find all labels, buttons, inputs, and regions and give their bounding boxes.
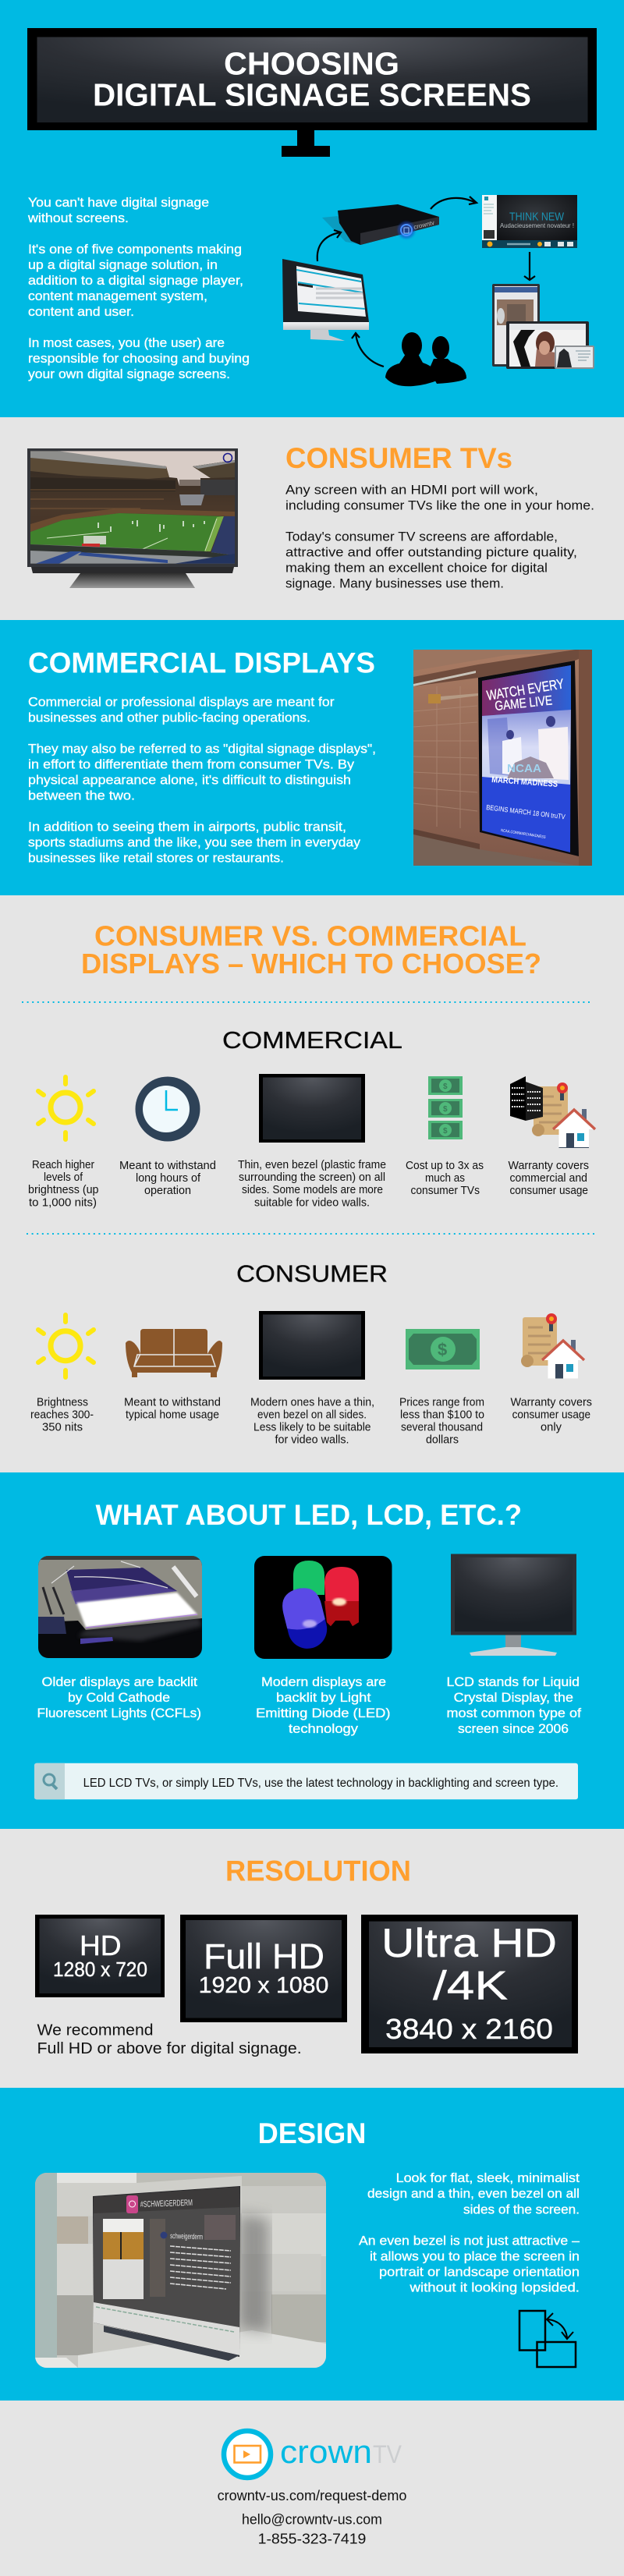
captions: commercial: to 1,000 nits) xyxy=(29,1196,97,1209)
image: subway digital poster: NCAA.COM/MARCHMADNESS xyxy=(501,828,546,840)
icon: desktop computer xyxy=(282,259,369,341)
captions: LED and LCD: technology xyxy=(289,1721,359,1736)
captions: commercial: operation xyxy=(144,1185,191,1197)
icon: clock xyxy=(136,1076,200,1142)
text: recommendation: Full HD or above for digital signage. xyxy=(37,2040,302,2057)
screen: Ultra HD 4K: /4K xyxy=(433,1964,508,2009)
logo: crownTV: crown xyxy=(280,2433,372,2470)
screen: Full HD: 1920 x 1080 xyxy=(199,1973,328,1998)
captions: consumer: typical home usage xyxy=(126,1409,219,1422)
captions: LED and LCD: by Cold Cathode xyxy=(68,1690,170,1705)
text: consumer TVs: attractive and offer outstanding picture quality, xyxy=(285,544,577,560)
captions: consumer xyxy=(30,1396,592,1447)
screen: Ultra HD 4K xyxy=(361,1915,578,2053)
captions: consumer: reaches 300- xyxy=(30,1409,94,1422)
captions: LED and LCD: Older displays are backlit xyxy=(42,1674,197,1689)
captions: consumer: only xyxy=(541,1422,562,1434)
intro text: You can't have digital signage xyxy=(28,195,209,210)
heading: design: DESIGN xyxy=(258,2117,366,2149)
title xyxy=(93,46,531,113)
intro text: In most cases, you (the user) are xyxy=(28,335,225,350)
captions: consumer: several thousand xyxy=(401,1422,483,1434)
icon: dollar bill xyxy=(406,1329,480,1369)
text: recommendation: We recommend xyxy=(37,2022,153,2039)
captions: commercial: Warranty covers xyxy=(509,1160,589,1172)
text: design: it allows you to place the screen in xyxy=(370,2249,580,2263)
text: design: portrait or landscape orientation xyxy=(379,2265,580,2279)
title: DIGITAL SIGNAGE SCREENS xyxy=(93,77,531,113)
text: consumer TVs: signage. Many businesses use them. xyxy=(285,576,504,590)
image: subway digital poster: NCAA xyxy=(507,762,541,775)
image: CCFL backlight xyxy=(38,1556,202,1658)
text: commercial displays: physical appearance alone, it's difficult to distinguish xyxy=(28,772,351,788)
heading: consumer vs commercial: CONSUMER VS. COMMERCIAL xyxy=(94,920,526,951)
intro text: content management system, xyxy=(28,289,207,303)
panel: intro xyxy=(0,0,624,417)
icon: sofa xyxy=(126,1329,222,1377)
image: wall-mounted screen xyxy=(35,2173,326,2368)
text: consumer TVs: Today's consumer TV screens are affordable, xyxy=(285,530,558,544)
title: CHOOSING xyxy=(224,46,399,82)
captions: LED and LCD: backlit by Light xyxy=(276,1690,371,1705)
captions: commercial: much as xyxy=(425,1172,465,1185)
contact details: crowntv-us.com/request-demo xyxy=(218,2487,406,2503)
screen: HD: HD xyxy=(80,1929,122,1961)
text: commercial displays: sports stadiums and the like, you see them in everyday xyxy=(28,834,361,849)
icon: sun xyxy=(38,1315,94,1377)
arrow: screen to devices xyxy=(524,252,535,280)
text: commercial displays: They may also be referred to as "digital signage displays", xyxy=(28,742,376,757)
text: design: Look for flat, sleek, minimalist xyxy=(396,2170,580,2185)
captions: consumer: Warranty covers xyxy=(510,1396,592,1408)
icon: signage screen: Audacieusement novateur ! xyxy=(500,222,574,229)
callout: LED LCD TVs xyxy=(34,1763,578,1799)
text: recommendation xyxy=(37,2022,302,2057)
panel: consumer vs commercial xyxy=(0,895,624,1472)
captions: consumer: consumer usage xyxy=(512,1409,590,1422)
text: consumer TVs: including consumer TVs like the one in your home. xyxy=(285,498,594,512)
captions: commercial: brightness (up xyxy=(28,1184,98,1196)
heading: consumer TVs: CONSUMER TVs xyxy=(285,442,512,474)
arrow: users to computer xyxy=(352,333,384,367)
intro text xyxy=(27,195,250,381)
contact details: 1-855-323-7419 xyxy=(258,2530,366,2547)
captions: LED and LCD: Fluorescent Lights (CCFLs) xyxy=(37,1706,201,1720)
subheading: consumer: CONSUMER xyxy=(236,1260,388,1288)
logo: crownTV xyxy=(224,2431,402,2478)
panel: commercial displays xyxy=(0,620,624,895)
image: wall-mounted screen: schweigerderm xyxy=(170,2232,203,2241)
contact details: hello@crowntv-us.com xyxy=(242,2511,382,2527)
text: commercial displays: between the two. xyxy=(28,788,135,803)
icon: signage screen: THINK NEW xyxy=(509,211,565,224)
icon: signage screen xyxy=(482,195,577,248)
icon: dollar bill: $ xyxy=(438,1340,447,1359)
image: LCD monitor xyxy=(451,1554,576,1656)
captions: commercial: levels of xyxy=(44,1171,83,1184)
image: subway digital poster: WATCH EVERY xyxy=(485,676,565,703)
text: commercial displays: businesses like retail stores or restaurants. xyxy=(28,850,284,865)
intro text: without screens. xyxy=(27,211,129,225)
captions: LED and LCD: Crystal Display, the xyxy=(454,1690,573,1705)
heading: what about LED, LCD: WHAT ABOUT LED, LCD, ETC.? xyxy=(95,1499,522,1531)
captions: LED and LCD xyxy=(37,1674,581,1736)
screen: HD xyxy=(35,1915,165,1997)
icon: media player: crowntv xyxy=(413,219,435,231)
captions: consumer: Brightness xyxy=(37,1396,88,1408)
title monitor xyxy=(27,28,597,157)
captions: commercial: surrounding the screen) on all xyxy=(239,1171,385,1184)
text: design xyxy=(359,2170,580,2294)
captions: commercial: commercial and xyxy=(510,1172,587,1185)
intro text: addition to a digital signage player, xyxy=(28,273,243,288)
image: subway digital poster: BEGINS MARCH 18 ON truTV xyxy=(486,803,566,820)
text: commercial displays: in effort to differentiate them from consumer TVs. By xyxy=(28,757,355,772)
image: TV with stadium xyxy=(27,448,238,588)
icon: money stack: $ xyxy=(443,1082,448,1091)
image: subway digital poster: MARCH MADNESS xyxy=(491,775,558,789)
image: subway digital poster: GAME LIVE xyxy=(494,693,553,714)
intro text: your own digital signage screens. xyxy=(28,367,230,381)
text: design: design and a thin, even bezel on all xyxy=(367,2186,580,2201)
arrow: computer to player xyxy=(317,230,341,261)
intro text: up a digital signage solution, in xyxy=(28,257,218,272)
captions: LED and LCD: most common type of xyxy=(446,1706,581,1720)
callout: LED LCD TVs: LED LCD TVs, or simply LED TVs, use the latest technology in backlighting and screen type. xyxy=(83,1777,558,1790)
intro text: It's one of five components making xyxy=(28,242,242,257)
panel: consumer TVs xyxy=(27,448,593,590)
captions: commercial: sides. Some models are more xyxy=(242,1184,383,1196)
screen: Full HD xyxy=(180,1915,347,2022)
image: RGB LEDs xyxy=(254,1556,392,1659)
captions: commercial: Reach higher xyxy=(32,1159,94,1171)
panel: LED and LCD xyxy=(0,1472,624,1829)
icon: screen xyxy=(259,1311,365,1380)
panel: design xyxy=(0,2088,624,2401)
captions: LED and LCD: LCD stands for Liquid xyxy=(446,1674,580,1689)
logo: crownTV: TV xyxy=(373,2440,402,2468)
text: design: sides of the screen. xyxy=(463,2202,580,2216)
icon: sun xyxy=(38,1077,94,1139)
captions: consumer: even bezel on all sides. xyxy=(257,1409,367,1422)
captions: commercial xyxy=(28,1159,589,1209)
captions: commercial: suitable for video walls. xyxy=(254,1196,370,1209)
heading: consumer vs commercial xyxy=(81,920,541,980)
text: commercial displays: Commercial or professional displays are meant for xyxy=(28,695,335,710)
intro text: responsible for choosing and buying xyxy=(28,351,250,366)
screen: Full HD: Full HD xyxy=(204,1936,324,1976)
text: design: An even bezel is not just attractive – xyxy=(359,2234,580,2248)
screen: HD: 1280 x 720 xyxy=(53,1958,147,1981)
text: consumer TVs: making them an excellent choice for digital xyxy=(285,560,548,575)
captions: consumer: Meant to withstand xyxy=(124,1396,221,1408)
image: wall-mounted screen: #SCHWEIGERDERM xyxy=(140,2199,193,2209)
icon: magnifier xyxy=(44,1774,57,1789)
icon: money stack: $ xyxy=(443,1105,448,1114)
captions: consumer: dollars xyxy=(426,1434,459,1447)
captions: consumer: for video walls. xyxy=(275,1434,349,1447)
text: commercial displays xyxy=(28,695,376,865)
captions: consumer: Modern ones have a thin, xyxy=(250,1396,374,1408)
intro text: content and user. xyxy=(28,304,134,319)
captions: commercial: Thin, even bezel (plastic frame xyxy=(238,1159,386,1171)
panel: resolution xyxy=(0,1829,624,2088)
captions: LED and LCD: Emitting Diode (LED) xyxy=(256,1706,390,1720)
icon: screen xyxy=(259,1074,365,1143)
icon: media player xyxy=(322,204,439,245)
captions: consumer: less than $100 to xyxy=(400,1409,484,1422)
icon: users xyxy=(385,332,466,386)
captions: LED and LCD: screen since 2006 xyxy=(458,1721,569,1736)
captions: consumer: 350 nits xyxy=(42,1422,83,1434)
text: consumer TVs: Any screen with an HDMI port will work, xyxy=(285,482,538,498)
text: commercial displays: In addition to seeing them in airports, public transit, xyxy=(28,819,346,834)
icon: money stack: $ xyxy=(443,1127,448,1136)
captions: commercial: consumer TVs xyxy=(410,1185,480,1197)
captions: commercial: Meant to withstand xyxy=(119,1160,216,1172)
captions: commercial: long hours of xyxy=(136,1172,201,1185)
contact details xyxy=(218,2487,406,2547)
captions: consumer: Less likely to be suitable xyxy=(254,1422,371,1434)
captions: LED and LCD: Modern displays are xyxy=(261,1674,386,1689)
arrow: player to screen xyxy=(431,197,477,209)
icon: rotate screen xyxy=(519,2311,576,2367)
heading: consumer vs commercial: DISPLAYS – WHICH TO CHOOSE? xyxy=(81,948,541,980)
captions: commercial: Cost up to 3x as xyxy=(406,1160,484,1172)
icon: money stack xyxy=(428,1076,463,1139)
heading: commercial displays: COMMERCIAL DISPLAYS xyxy=(28,647,375,679)
image: subway digital poster xyxy=(413,650,592,866)
text: consumer TVs xyxy=(285,482,594,590)
heading: resolution: RESOLUTION xyxy=(225,1855,411,1887)
text: design: without it looking lopsided. xyxy=(409,2280,580,2294)
text: commercial displays: businesses and other public-facing operations. xyxy=(28,710,310,725)
icon: consumer warranty xyxy=(521,1313,585,1379)
captions: commercial: consumer usage xyxy=(510,1185,588,1197)
panel: footer xyxy=(0,2401,624,2576)
icon: tablets and devices xyxy=(492,284,594,369)
icon: commercial warranty xyxy=(510,1076,596,1148)
subheading: commercial: COMMERCIAL xyxy=(222,1026,402,1054)
captions: consumer: Prices range from xyxy=(399,1396,484,1408)
screen: Ultra HD 4K: 3840 x 2160 xyxy=(385,2013,553,2045)
screen: Ultra HD 4K: Ultra HD xyxy=(381,1921,557,1966)
